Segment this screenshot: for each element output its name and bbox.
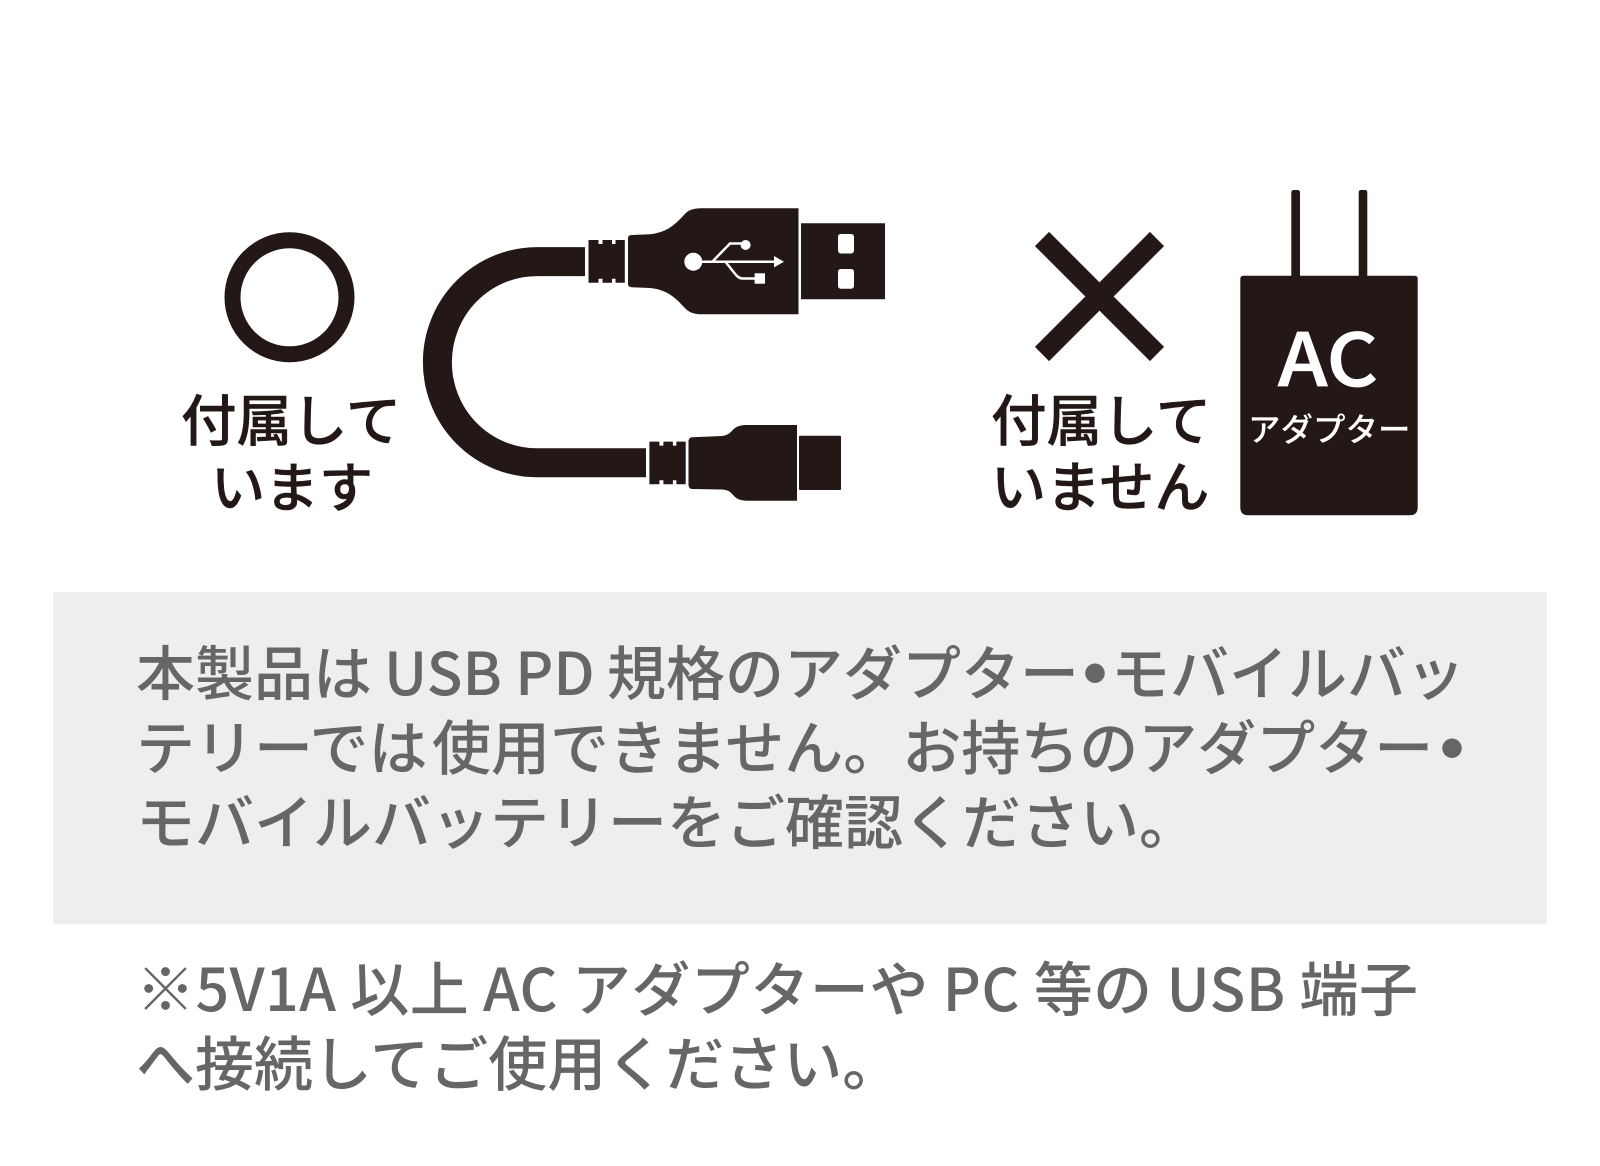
notice text: ・ xyxy=(1057,614,1133,724)
notice text: ・ xyxy=(1414,689,1490,799)
notice text xyxy=(136,614,1490,861)
icon: AC adapter xyxy=(1240,190,1418,515)
icon: USB cable xyxy=(437,208,885,501)
upper strain relief xyxy=(588,240,625,283)
notice text: テリーでは xyxy=(136,702,427,786)
label: not included xyxy=(991,377,1211,523)
footnote text xyxy=(136,943,1418,1102)
footnote text: へ接続してご使用ください。 xyxy=(136,1018,901,1102)
notice text: 規格のアダプター xyxy=(607,627,1079,712)
notice text: USB PD xyxy=(384,627,595,712)
adapter body xyxy=(1240,276,1418,515)
label: included: 付属して xyxy=(181,377,401,457)
USB-C metal tip xyxy=(799,436,841,490)
notice text: モバイルバッ xyxy=(1111,627,1465,712)
notice text: 使用できません。お持ちのアダプター xyxy=(432,702,1433,786)
label: included: います xyxy=(211,444,373,523)
USB-A metal tip xyxy=(801,223,885,299)
notice text: モバイルバッテリーをご確認ください。 xyxy=(136,776,1198,861)
icon: cross mark (not included) xyxy=(1042,239,1157,354)
label: not included: 付属して xyxy=(991,377,1211,457)
footnote text: ※5V1A 以上 AC アダプターや PC 等の USB 端子 xyxy=(136,943,1418,1028)
label: included xyxy=(181,377,401,523)
USB-C plug body xyxy=(688,425,797,501)
adapter prongs xyxy=(1291,190,1367,276)
panel background xyxy=(53,592,1547,924)
icon: USB trident symbol xyxy=(684,240,784,284)
notice text: 本製品は xyxy=(136,627,372,712)
icon: circle mark (included) xyxy=(232,240,346,354)
panel: notice xyxy=(53,592,1547,924)
label: not included: いません xyxy=(991,443,1209,523)
adapter text: AC: AC xyxy=(1278,302,1378,408)
lower strain relief xyxy=(649,442,686,484)
cable cord xyxy=(437,262,646,463)
adapter text: アダプター: アダプター xyxy=(1248,404,1411,451)
USB-A plug body xyxy=(628,208,798,314)
